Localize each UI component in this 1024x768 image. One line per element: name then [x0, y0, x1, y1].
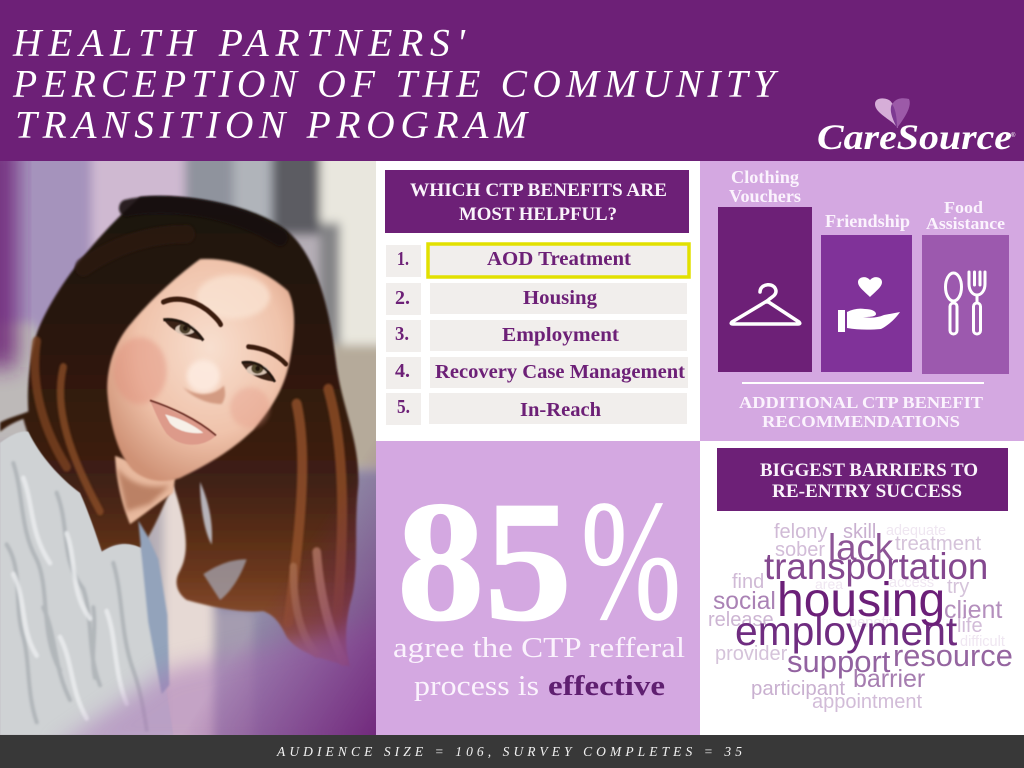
word cloud: area: [815, 576, 843, 592]
list row 4: Recovery Case Management: [386, 357, 688, 389]
caption: additional recommendations: ADDITIONAL CTP BENEFIT: [739, 393, 984, 412]
purple fade top-left: [0, 138, 17, 367]
big number: [397, 466, 681, 657]
word cloud: access: [889, 575, 934, 591]
card: friendship: [821, 211, 912, 372]
photo: smiling woman: [0, 138, 390, 752]
statement: [393, 632, 685, 702]
logo: CareSource: [817, 98, 1016, 157]
footer: audience note: [0, 735, 1024, 768]
word cloud: client: [944, 596, 1002, 624]
big number: %: [581, 466, 681, 656]
brows: [163, 299, 286, 364]
word cloud: social: [713, 588, 776, 615]
panel: 85 percent statistic: [376, 441, 700, 735]
title: [12, 20, 779, 146]
word cloud: find: [732, 571, 764, 593]
word cloud: life: [957, 615, 983, 637]
list row 1: AOD Treatment: AOD Treatment: [487, 249, 632, 270]
panel: header band: [0, 0, 1024, 161]
caption: additional recommendations: [739, 393, 984, 431]
light gaps in hair: [200, 482, 212, 545]
word cloud: participant: [751, 678, 845, 700]
word cloud: try: [947, 576, 969, 598]
statement: effective: [548, 670, 665, 702]
big number: 85: [397, 467, 572, 657]
list row 3: Employment: Employment: [502, 325, 620, 346]
word cloud: felony: [774, 521, 827, 543]
hair back: [0, 196, 358, 667]
mouth: [150, 400, 216, 445]
statement: agree the CTP refferal: [393, 632, 685, 664]
statement: process is: [414, 670, 539, 702]
card: friendship: Friendship: [825, 211, 910, 231]
list row 5: In-Reach: [386, 393, 687, 425]
icon: spoon and fork: [946, 272, 985, 334]
list row 5: In-Reach: In-Reach: [520, 400, 601, 421]
title: PERCEPTION OF THE COMMUNITY: [12, 62, 779, 106]
word cloud: housing: [777, 574, 945, 627]
panel: additional CTP benefit recommendations: [700, 161, 1024, 441]
list row 3: Employment: 3.: [395, 324, 409, 345]
card: clothing vouchers: [718, 167, 812, 372]
panel: biggest barriers to re-entry success: [700, 441, 1024, 735]
heading: benefits: [385, 170, 689, 233]
card: clothing vouchers: Vouchers: [729, 186, 801, 206]
card: clothing vouchers: Clothing: [731, 167, 799, 187]
word cloud: transportation: [764, 546, 988, 587]
word cloud: [708, 521, 1013, 713]
list row 2: Housing: [386, 283, 687, 315]
word cloud: adequate: [886, 523, 946, 539]
word cloud: employment: [735, 608, 958, 654]
logo: CareSource: ®: [1011, 132, 1016, 139]
list row 2: Housing: Housing: [523, 288, 597, 309]
cheek blush: [113, 337, 167, 404]
eyes: [163, 319, 275, 382]
neck: [115, 456, 175, 524]
word cloud: benefit: [849, 615, 893, 631]
list row 4: Recovery Case Management: Recovery Case Management: [435, 362, 686, 383]
logo: CareSource: CareSource: [817, 117, 1012, 157]
card: food assistance: Food: [944, 198, 984, 217]
word cloud: resource: [893, 638, 1013, 673]
footer: audience note: AUDIENCE SIZE = 106, SURVEY COMPLETES = 35: [276, 744, 742, 759]
word cloud: sober: [775, 539, 825, 561]
heading: barriers: BIGGEST BARRIERS TO: [760, 460, 978, 481]
sweater: [0, 431, 173, 735]
panel: which CTP benefits are most helpful: [376, 161, 700, 441]
icon: hanger: [731, 285, 800, 324]
list row 2: Housing: 2.: [395, 288, 410, 309]
heading: barriers: RE-ENTRY SUCCESS: [772, 481, 962, 502]
nose: [187, 360, 220, 393]
word cloud: difficult: [960, 634, 1005, 650]
caption: additional recommendations: RECOMMENDATIONS: [762, 412, 960, 431]
title: TRANSITION PROGRAM: [15, 102, 529, 146]
list row 3: Employment: [386, 320, 687, 352]
card: food assistance: Assistance: [926, 214, 1005, 233]
lilac and purple fade bottom: [50, 619, 390, 752]
heading: benefits: MOST HELPFUL?: [459, 204, 617, 225]
list row 1: AOD Treatment: 1.: [397, 249, 409, 270]
heading: benefits: WHICH CTP BENEFITS ARE: [410, 180, 667, 201]
list row 4: Recovery Case Management: 4.: [395, 361, 410, 382]
list row 5: In-Reach: 5.: [397, 397, 410, 418]
card: food assistance: [922, 198, 1009, 374]
word cloud: skill: [843, 521, 876, 543]
list row 1: AOD Treatment: [386, 244, 689, 277]
word cloud: support: [787, 644, 891, 679]
word cloud: barrier: [853, 665, 925, 693]
title: HEALTH PARTNERS': [12, 20, 466, 64]
word cloud: release: [708, 609, 774, 631]
face: [107, 259, 294, 481]
word cloud: treatment: [895, 533, 981, 555]
heading: barriers: [717, 448, 1008, 511]
word cloud: provider: [715, 643, 788, 665]
cardigan strip: [138, 521, 169, 694]
word cloud: lack: [828, 527, 894, 568]
icon: heart in hand: [838, 277, 900, 332]
word cloud: appointment: [812, 691, 923, 713]
